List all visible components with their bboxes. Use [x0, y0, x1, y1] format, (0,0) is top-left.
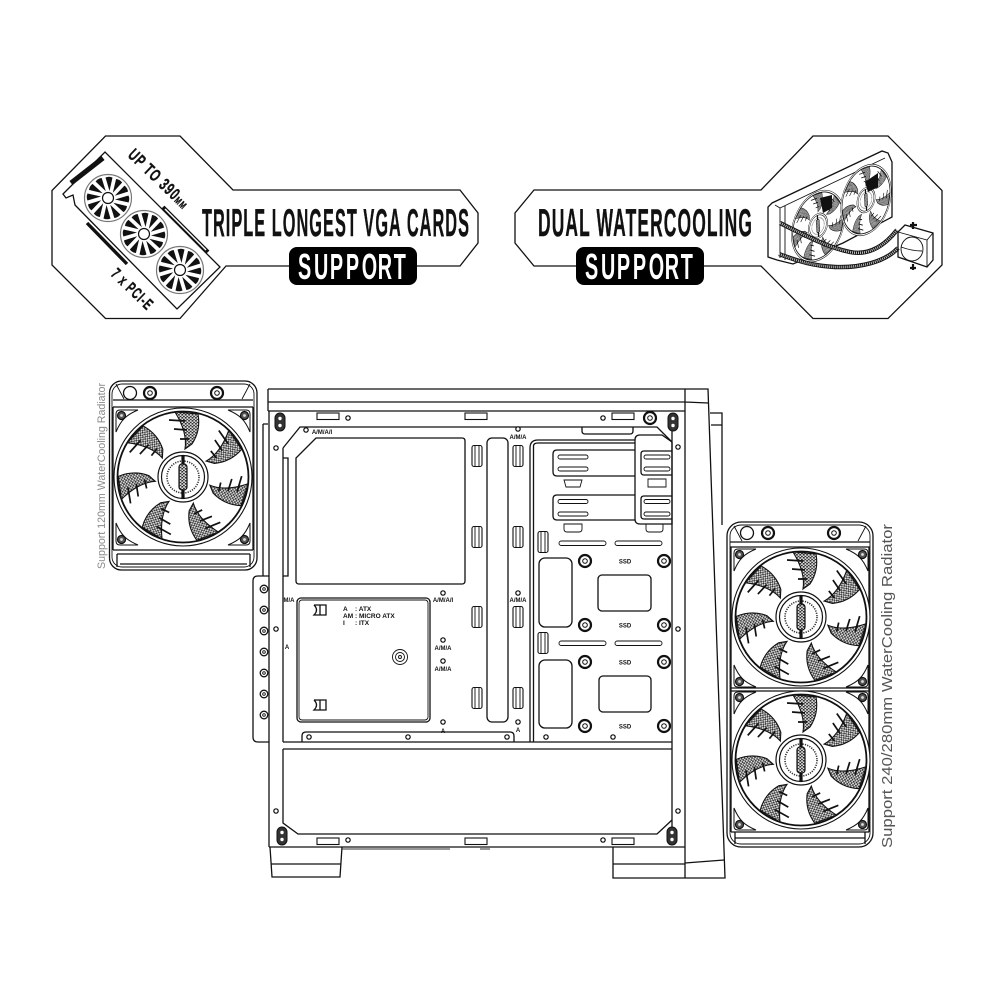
SSD mounts: SSD	[619, 560, 632, 566]
cable tie points	[472, 446, 548, 708]
standoff legend: : MICRO ATX	[355, 613, 395, 620]
case outer shell	[268, 389, 725, 878]
standoff legend: AM	[343, 613, 353, 620]
icon: graphics card	[63, 152, 220, 309]
standoff markers: A/M/A/I	[433, 598, 453, 604]
bottom strip details	[277, 827, 677, 849]
motherboard bottom strip	[302, 732, 514, 742]
motherboard lower cutout	[297, 598, 430, 722]
standoff markers: A/M/A	[434, 667, 452, 673]
drive bays	[553, 450, 635, 532]
standoff markers: A/M/A/I	[312, 430, 332, 436]
frame holes	[274, 445, 680, 813]
SSD mounts: SSD	[619, 724, 632, 730]
drive tray divider	[530, 440, 635, 742]
front bezel lines	[613, 847, 724, 878]
support pill: SUPPORT	[298, 248, 406, 288]
standoff markers: A	[516, 728, 521, 734]
standoff markers: A/M/A	[510, 435, 527, 441]
SSD mounts: SSD	[619, 624, 632, 630]
SSD mounts	[539, 541, 670, 739]
left foot	[270, 847, 342, 877]
badge outline	[52, 136, 478, 318]
icon: liquid cooler	[768, 151, 933, 272]
standoff markers: A	[441, 729, 446, 735]
left side bracket	[253, 424, 269, 742]
standoff markers: A/M/A	[434, 646, 452, 652]
bracket screws	[260, 585, 268, 719]
inner panel frame	[283, 427, 672, 834]
computer case	[253, 389, 725, 878]
standoff markers: A	[285, 645, 290, 651]
label: 120mm radiator: Support 120mm WaterCooling Radiator	[96, 383, 108, 569]
standoff markers: A/M/A	[510, 598, 527, 604]
label: up to 390mm: UP TO 390MM	[124, 145, 194, 213]
radiator: 120mm	[110, 381, 257, 570]
standoff legend: : ITX	[355, 620, 370, 627]
standoff legend: I	[343, 620, 345, 627]
standoff markers	[284, 427, 527, 735]
support pill: SUPPORT	[585, 248, 693, 288]
cable routing slot	[487, 438, 508, 722]
motherboard upper cutout	[296, 438, 465, 584]
standoff legend: A	[343, 606, 348, 613]
badge outline	[515, 136, 942, 318]
SSD mounts: SSD	[619, 660, 632, 666]
label: 7 x PCI-E: 7 x PCI-E	[107, 266, 156, 314]
badge: triple longest VGA cards	[52, 136, 478, 318]
standoff legend: : ATX	[355, 606, 372, 613]
drive bracket	[635, 435, 672, 532]
standoff markers: M/A	[284, 598, 295, 604]
badge: dual watercooling	[515, 136, 942, 318]
text: TRIPLE LONGEST VGA CARDS	[202, 202, 470, 245]
label: 240/280mm radiator: Support 240/280mm WaterCooling Radiator	[880, 524, 896, 848]
top strip details	[275, 412, 678, 434]
radiator: 240/280mm	[727, 522, 873, 847]
